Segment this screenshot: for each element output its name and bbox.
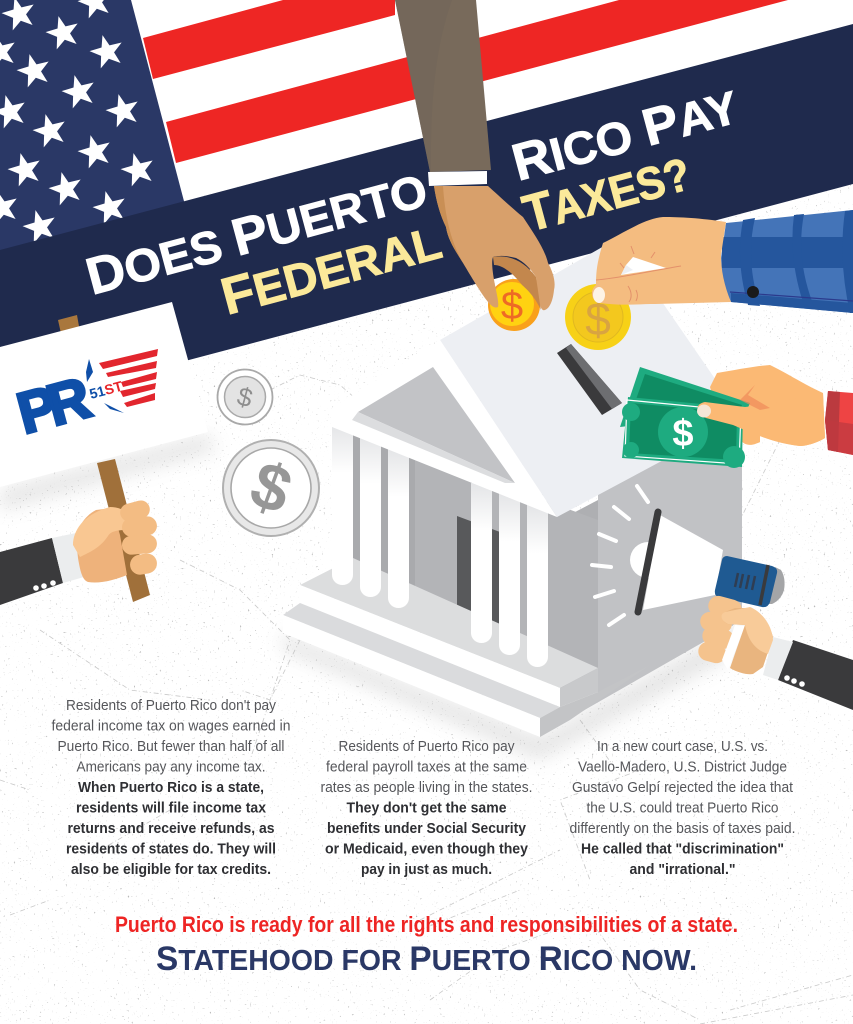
roof top: [440, 238, 742, 517]
hand holding megaphone: [696, 594, 853, 710]
text column 2: benefits under Social Security: [327, 820, 527, 837]
logo: PR: PR: [11, 365, 97, 447]
front bill: [622, 397, 743, 467]
title: line two: TAXES?: [517, 144, 696, 244]
palm: [76, 508, 127, 583]
red sleeve: [825, 391, 853, 455]
text column 3: the U.S. could treat Puerto Rico: [586, 800, 778, 816]
coin: yellow: [565, 284, 631, 350]
text column 2: or Medicaid, even though they: [325, 840, 529, 858]
building shadow: [283, 622, 760, 760]
coin: yellow: $: [585, 293, 611, 345]
large grey coin: [223, 440, 319, 536]
brown suit sleeve: [395, 0, 491, 186]
footer: call to action: STATEHOOD FOR PUERTO RICO NOW.: [156, 940, 697, 978]
title: line one: [80, 77, 744, 307]
title: line two: FEDERAL: [215, 212, 447, 327]
text column 1: also be eligible for tax credits.: [71, 861, 271, 878]
sign handle: [97, 459, 150, 602]
text column 3: He called that "discrimination": [581, 840, 784, 858]
text column 1: Puerto Rico. But fewer than half of all: [58, 738, 284, 755]
right side wall: [560, 410, 742, 724]
pediment frame: [332, 340, 557, 517]
back bill: [620, 367, 750, 427]
brown hand: [434, 186, 555, 310]
palm: [722, 608, 773, 674]
fingers: [696, 594, 744, 665]
megaphone: [592, 486, 785, 625]
text column 2: federal payroll taxes at the same: [326, 758, 527, 776]
columns: [332, 425, 548, 667]
text column 3: differently on the basis of taxes paid.: [570, 820, 796, 837]
text column 2: Residents of Puerto Rico pay: [338, 738, 515, 755]
rim: [638, 512, 658, 612]
logo: star spikes: [86, 359, 124, 413]
sound rays: [592, 486, 648, 625]
blue plaid sleeve: [721, 210, 853, 313]
text column 2: They don't get the same: [346, 800, 506, 816]
back dome: [630, 542, 666, 578]
logo: 51ST: 51ST: [88, 378, 125, 402]
text column 3: and "irrational.": [630, 861, 736, 878]
text column 1: residents of states do. They will: [66, 840, 276, 858]
text column 1: residents will file income tax: [76, 800, 267, 816]
title: line one: DOES PUERTO: [80, 160, 433, 307]
small grey coin: [218, 370, 272, 424]
light hand holding coin: [592, 217, 731, 305]
steps: [300, 558, 598, 688]
text column 2: pay in just as much.: [361, 861, 492, 878]
cuff: [763, 637, 793, 680]
hand with money: back: [710, 365, 825, 446]
text column 1: federal income tax on wages earned in: [52, 718, 290, 734]
recessed front wall: [353, 430, 598, 668]
text column 2: [320, 738, 532, 878]
bank building: [283, 238, 742, 737]
shadow under sign: [0, 434, 216, 510]
hand holding sign: [0, 498, 159, 605]
coin: being dropped by brown hand: [488, 279, 540, 331]
coin slot: [557, 344, 622, 415]
text column 3: In a new court case, U.S. vs.: [597, 738, 768, 755]
rear cap: [766, 567, 785, 604]
large grey coin: $: [241, 446, 301, 528]
title: line one: RICO PAY: [506, 77, 744, 193]
text column 1: returns and receive refunds, as: [68, 820, 274, 837]
text column 1: When Puerto Rico is a state,: [78, 779, 264, 796]
text column 3: [570, 738, 796, 878]
cuff: [52, 533, 84, 583]
text column 3: Vaello-Madero, U.S. District Judge: [578, 758, 787, 776]
dark sleeve: [778, 640, 853, 710]
sign handle top: [58, 315, 80, 338]
door: [457, 516, 500, 627]
protest sign with logo: [0, 302, 208, 487]
small grey coin: $: [234, 381, 256, 413]
white handle: [722, 625, 745, 670]
text column 1: [52, 697, 290, 878]
flag: canton with stars: [0, 0, 185, 255]
coin: being dropped by brown hand: $: [501, 284, 523, 328]
title: line two: [215, 144, 696, 327]
dollar bills: $: [672, 413, 694, 455]
cone: [643, 515, 723, 610]
text column 2: rates as people living in the states.: [320, 779, 532, 796]
logo: stripes: [99, 349, 158, 407]
cuff: [428, 171, 487, 186]
hand with money: thumb: [697, 385, 825, 446]
text column 1: Americans pay any income tax.: [76, 758, 266, 776]
fingers: [118, 498, 159, 576]
sleeve: [0, 538, 63, 605]
title banner: [0, 24, 853, 410]
text column 3: Gustavo Gelpí rejected the idea that: [572, 779, 794, 796]
pediment inner: [358, 367, 515, 483]
footer: red statement: Puerto Rico is ready for all the rights and responsibilities of a state.: [115, 912, 738, 937]
flag: stripes: [131, 0, 853, 200]
dollar bills: [620, 367, 750, 468]
text column 1: Residents of Puerto Rico don't pay: [66, 697, 276, 714]
body: [715, 556, 777, 607]
